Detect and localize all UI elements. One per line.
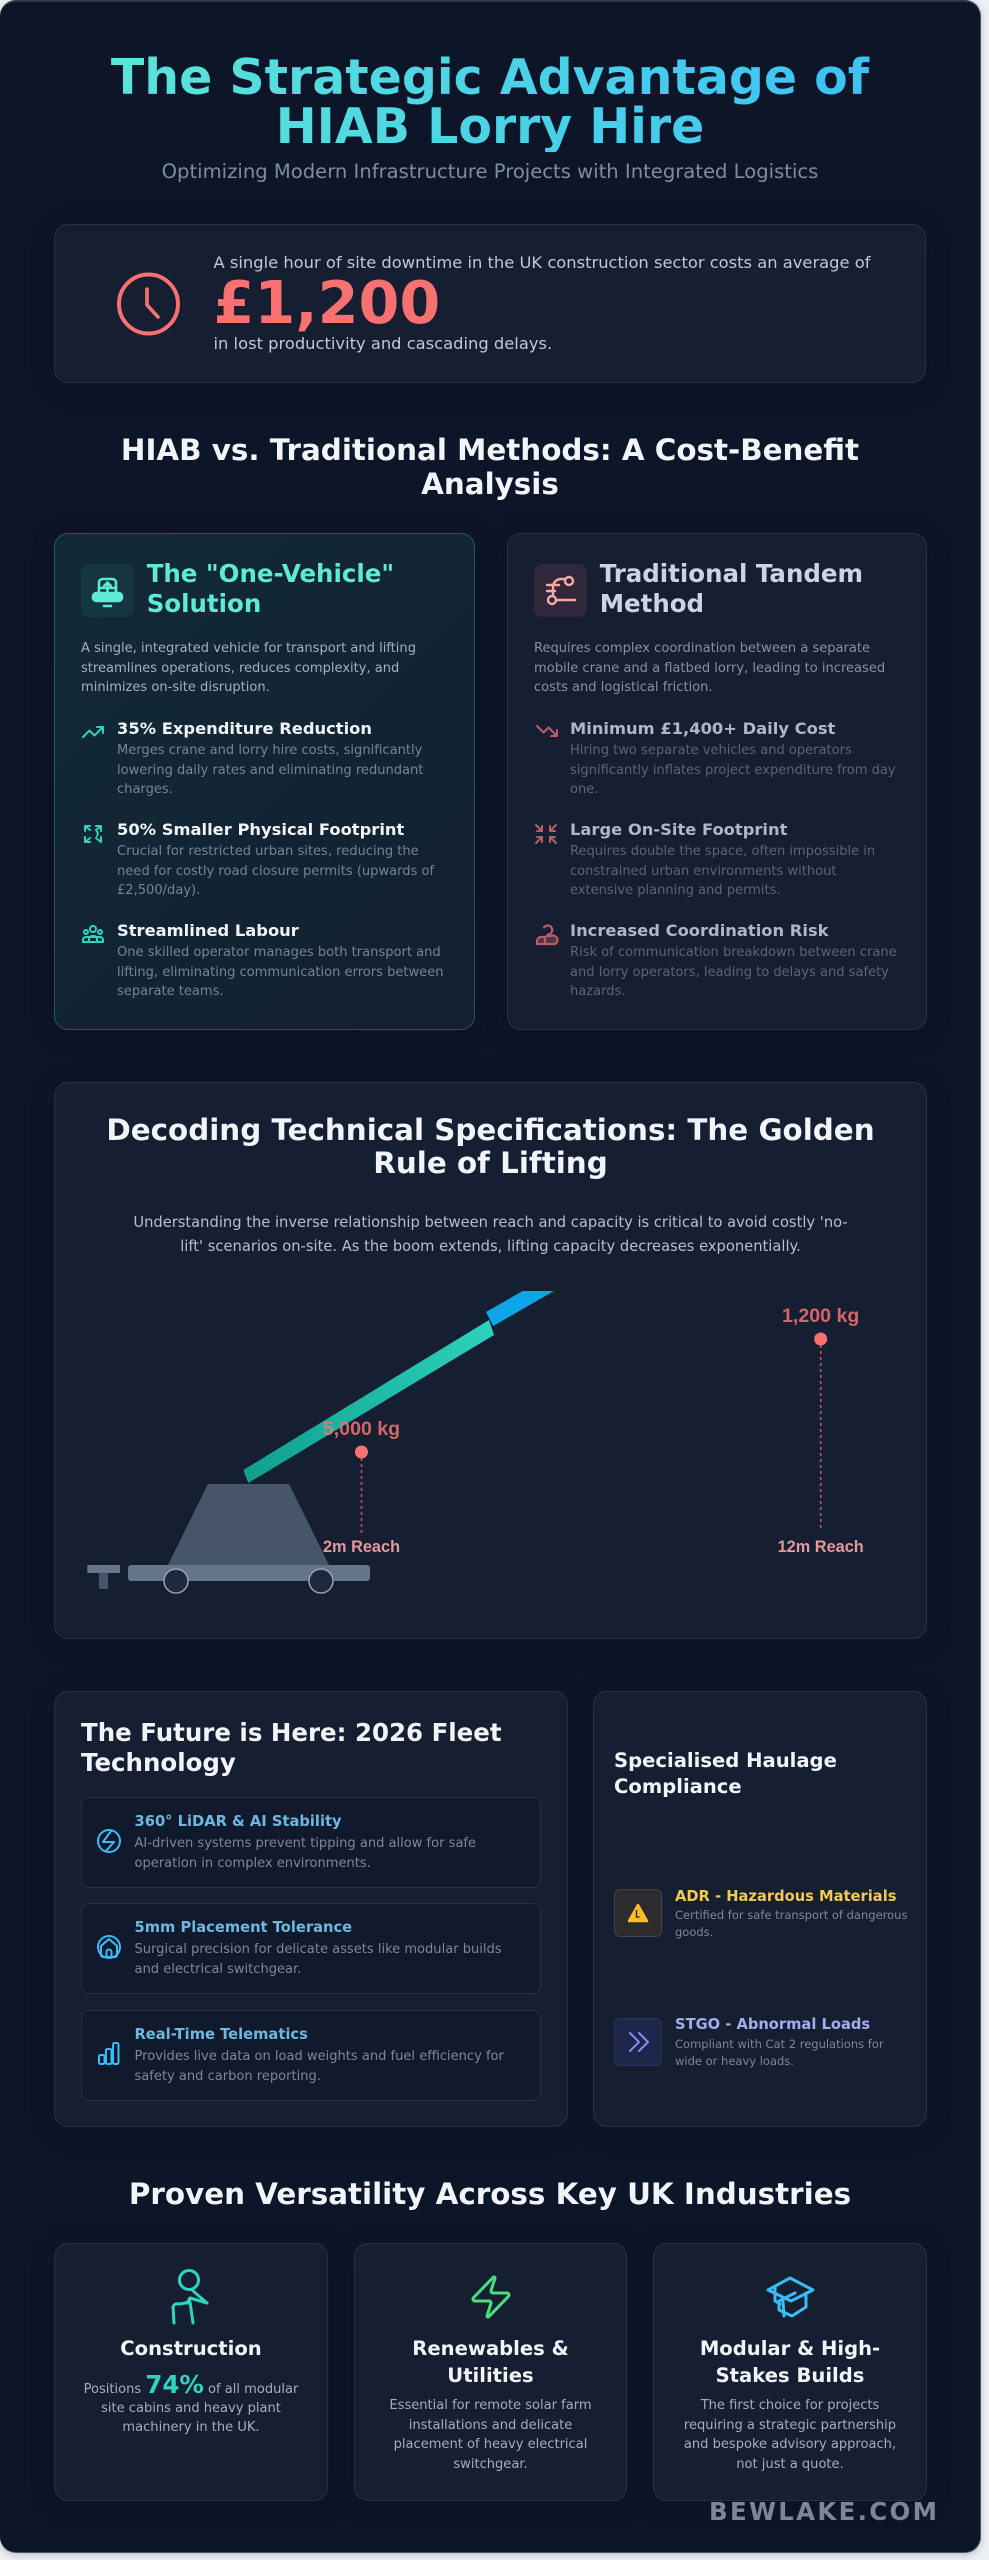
text: reach vs capacity: lift' scenarios on-site. As the boom extends, lifting capacity decreases exponentially. xyxy=(180,1238,801,1255)
icon: graduation cap xyxy=(764,2274,816,2320)
callout figure: £1,200 xyxy=(214,268,440,337)
item description: AI-driven systems prevent tipping and allow for safe xyxy=(134,1836,476,1851)
text: renewables: installations and delicate xyxy=(409,2418,572,2433)
boom extension xyxy=(486,1291,554,1326)
icon: bar chart xyxy=(98,2042,120,2065)
text: modular: requiring a strategic partnership xyxy=(684,2418,896,2433)
text: renewables xyxy=(355,2396,626,2474)
icon: tandem xyxy=(534,564,587,617)
icon: trending down xyxy=(536,725,558,737)
heading: fleet technology: Technology xyxy=(81,1748,236,1776)
heading: renewables xyxy=(355,2336,626,2389)
text: renewables: Essential for remote solar farm xyxy=(389,2398,592,2413)
item description xyxy=(675,2037,884,2068)
near reach marker xyxy=(355,1446,368,1533)
outrigger xyxy=(87,1565,120,1589)
icon: chevrons xyxy=(614,2018,662,2066)
feature description: separate teams. xyxy=(117,984,224,999)
heading: traditional: Traditional Tandem xyxy=(600,559,863,588)
text: one-vehicle summary: minimizes on-site disruption. xyxy=(81,680,270,695)
panel: haulage compliance xyxy=(593,1691,927,2127)
title: The Strategic Advantage of xyxy=(111,49,869,106)
text: traditional summary: costs and logistical friction. xyxy=(534,680,713,695)
item description: goods. xyxy=(675,1924,713,1938)
feature description: £2,500/day). xyxy=(117,883,200,898)
text: renewables: switchgear. xyxy=(453,2457,528,2472)
feature: labour xyxy=(82,921,444,999)
text: modular: not just a quote. xyxy=(736,2457,844,2472)
item title: STGO - Abnormal Loads xyxy=(675,2016,870,2033)
item description: operation in complex environments. xyxy=(134,1856,371,1871)
text: one-vehicle summary xyxy=(81,641,416,695)
feature description: significantly inflates project expenditure from day xyxy=(570,763,896,778)
feature title: 35% Expenditure Reduction xyxy=(117,719,372,738)
heading: golden rule xyxy=(106,1113,875,1180)
feature: large footprint xyxy=(535,820,875,898)
icon: compress arrows xyxy=(535,824,557,844)
icon: lightning bolt xyxy=(467,2273,515,2321)
item description xyxy=(134,2049,504,2084)
icon: home circle xyxy=(97,1935,121,1959)
heading: modular: Stakes Builds xyxy=(716,2364,864,2387)
label: 1,200 kg: 1,200 kg xyxy=(782,1305,859,1327)
feature title: Minimum £1,400+ Daily Cost xyxy=(570,719,835,738)
panel: downtime cost callout xyxy=(54,224,926,383)
item description: Provides live data on load weights and fuel efficiency for xyxy=(134,2049,504,2064)
icon: reduced footprint xyxy=(84,825,102,843)
crane base xyxy=(168,1484,329,1565)
text lines: remainder: site cabins and heavy plant xyxy=(101,2401,281,2416)
feature description: need for costly road closure permits (upwards of xyxy=(117,864,434,879)
item description: safety and carbon reporting. xyxy=(134,2069,321,2084)
icon: coordination xyxy=(536,924,558,946)
title xyxy=(0,53,980,152)
far reach marker xyxy=(814,1332,827,1529)
item: lidar xyxy=(81,1797,541,1888)
heading: haulage: Specialised Haulage xyxy=(614,1749,837,1772)
feature description: one. xyxy=(570,782,598,797)
wheel rear xyxy=(164,1569,188,1593)
label: 12m reach: 12m Reach xyxy=(778,1538,864,1556)
feature description: and lorry operators, leading to delays and safety xyxy=(570,965,889,980)
item title: Real-Time Telematics xyxy=(134,2026,308,2043)
feature: footprint xyxy=(84,820,434,898)
icon: one-vehicle xyxy=(81,564,134,617)
icon: team xyxy=(82,925,104,943)
heading: haulage xyxy=(614,1749,837,1798)
heading: haulage: Compliance xyxy=(614,1775,742,1798)
text: reach vs capacity: Understanding the inverse relationship between reach and capacity is critical to avoid costly 'no- xyxy=(133,1214,848,1231)
feature description: Hiring two separate vehicles and operators xyxy=(570,743,852,758)
heading: one-vehicle: Solution xyxy=(147,589,261,618)
heading: traditional xyxy=(600,559,863,618)
item description: Certified for safe transport of dangerous xyxy=(675,1908,907,1922)
text: one-vehicle summary: A single, integrated vehicle for transport and lifting xyxy=(81,641,416,656)
heading: modular xyxy=(654,2336,926,2389)
text lines: remainder: machinery in the UK. xyxy=(122,2420,260,2435)
lorry bed xyxy=(128,1565,370,1581)
feature description xyxy=(117,945,444,999)
item description xyxy=(134,1836,476,1871)
text: renewables: placement of heavy electrical xyxy=(394,2437,587,2452)
item description: and electrical switchgear. xyxy=(134,1962,301,1977)
heading: cost-benefit: HIAB vs. Traditional Methods: A Cost-Benefit xyxy=(121,433,859,467)
item title: 360° LiDAR & AI Stability xyxy=(134,1813,342,1830)
feature title: Increased Coordination Risk xyxy=(570,921,829,940)
item description: wide or heavy loads. xyxy=(675,2054,794,2068)
feature description: Crucial for restricted urban sites, reducing the xyxy=(117,844,419,859)
feature description xyxy=(570,743,896,797)
panel: construction xyxy=(54,2243,328,2501)
feature description: hazards. xyxy=(570,984,625,999)
icon: trending up xyxy=(82,726,104,738)
feature: expenditure xyxy=(82,719,424,797)
main boom xyxy=(243,1320,494,1483)
heading: cost-benefit: Analysis xyxy=(421,467,559,501)
feature description xyxy=(570,945,897,999)
text line with 74% figure: Positions 74% of all modular xyxy=(84,2370,298,2398)
heading: construction: Construction xyxy=(120,2337,262,2360)
heading: industries: Proven Versatility Across Key UK Industries xyxy=(129,2177,851,2211)
text: construction xyxy=(84,2370,298,2435)
feature: daily cost xyxy=(536,719,896,797)
watermark: BEWLAKE.COM xyxy=(709,2497,939,2526)
heading: golden rule: Decoding Technical Specifications: The Golden xyxy=(106,1113,875,1147)
feature description: lifting, eliminating communication errors between xyxy=(117,965,444,980)
feature description: One skilled operator manages both transport and xyxy=(117,945,441,960)
feature title: Streamlined Labour xyxy=(117,921,299,940)
text: traditional summary xyxy=(534,641,885,695)
feature description: constrained urban environments without xyxy=(570,864,836,879)
feature description: Merges crane and lorry hire costs, significantly xyxy=(117,743,422,758)
label: 5,000 kg: 5,000 kg xyxy=(323,1418,400,1440)
item: telematics xyxy=(81,2010,541,2101)
item: placement xyxy=(81,1903,541,1994)
item title: 5mm Placement Tolerance xyxy=(134,1919,352,1936)
icon: worker xyxy=(172,2269,209,2324)
callout text: lead-in: A single hour of site downtime in the UK construction sector costs an average of xyxy=(214,253,870,272)
feature title: 50% Smaller Physical Footprint xyxy=(117,820,404,839)
callout text: outcome: in lost productivity and cascading delays. xyxy=(214,334,552,353)
item: ADR xyxy=(614,1888,907,1938)
heading: traditional: Method xyxy=(600,589,704,618)
item description xyxy=(675,1908,907,1938)
feature description: extensive planning and permits. xyxy=(570,883,781,898)
feature description xyxy=(570,844,875,898)
heading: one-vehicle: The "One-Vehicle" xyxy=(147,559,394,588)
text: modular: and bespoke advisory approach, xyxy=(684,2437,896,2452)
feature: coordination risk xyxy=(536,921,897,999)
text: traditional summary: Requires complex coordination between a separate xyxy=(534,641,870,656)
panel: renewables xyxy=(354,2243,627,2501)
heading: fleet technology: The Future is Here: 2026 Fleet xyxy=(81,1718,502,1747)
heading: modular: Modular & High- xyxy=(700,2337,880,2360)
heading: fleet technology xyxy=(81,1718,502,1776)
icon: clock xyxy=(117,272,180,336)
feature description: charges. xyxy=(117,782,173,797)
feature description: Requires double the space, often impossible in xyxy=(570,844,875,859)
panel: fleet technology xyxy=(54,1691,568,2127)
panel: technical specifications xyxy=(54,1082,927,1639)
heading: renewables: Renewables & xyxy=(412,2337,569,2360)
text: one-vehicle summary: streamlines operations, reduces complexity, and xyxy=(81,661,399,676)
item title: ADR - Hazardous Materials xyxy=(675,1888,896,1905)
item: STGO xyxy=(614,2016,884,2068)
item description: Surgical precision for delicate assets like modular builds xyxy=(134,1942,502,1957)
heading: renewables: Utilities xyxy=(447,2364,534,2387)
feature description: lowering daily rates and eliminating redundant xyxy=(117,763,423,778)
heading: cost-benefit xyxy=(121,433,859,501)
feature title: Large On-Site Footprint xyxy=(570,820,787,839)
text lines: remainder xyxy=(55,2399,327,2438)
feature description: Risk of communication breakdown between crane xyxy=(570,945,897,960)
icon: hazard xyxy=(614,1889,662,1937)
label: 2m reach: 2m Reach xyxy=(323,1538,400,1556)
icon: lidar bolt xyxy=(97,1829,121,1853)
heading: one-vehicle xyxy=(146,559,394,618)
item description: Compliant with Cat 2 regulations for xyxy=(675,2037,884,2051)
heading: golden rule: Rule of Lifting xyxy=(373,1146,608,1180)
panel: modular builds xyxy=(653,2243,927,2501)
wheel front xyxy=(309,1569,333,1593)
text: modular xyxy=(654,2396,926,2474)
feature description xyxy=(117,743,424,797)
text: modular: The first choice for projects xyxy=(701,2398,879,2413)
panel: traditional tandem method xyxy=(507,533,927,1030)
text: traditional summary: mobile crane and a flatbed lorry, leading to increased xyxy=(534,661,885,676)
panel: one-vehicle solution xyxy=(54,533,475,1030)
item description xyxy=(134,1942,502,1977)
title: HIAB Lorry Hire xyxy=(276,98,704,155)
feature description xyxy=(117,844,434,898)
text: reach vs capacity xyxy=(133,1214,848,1255)
subtitle: Optimizing Modern Infrastructure Projects with Integrated Logistics xyxy=(162,160,818,183)
